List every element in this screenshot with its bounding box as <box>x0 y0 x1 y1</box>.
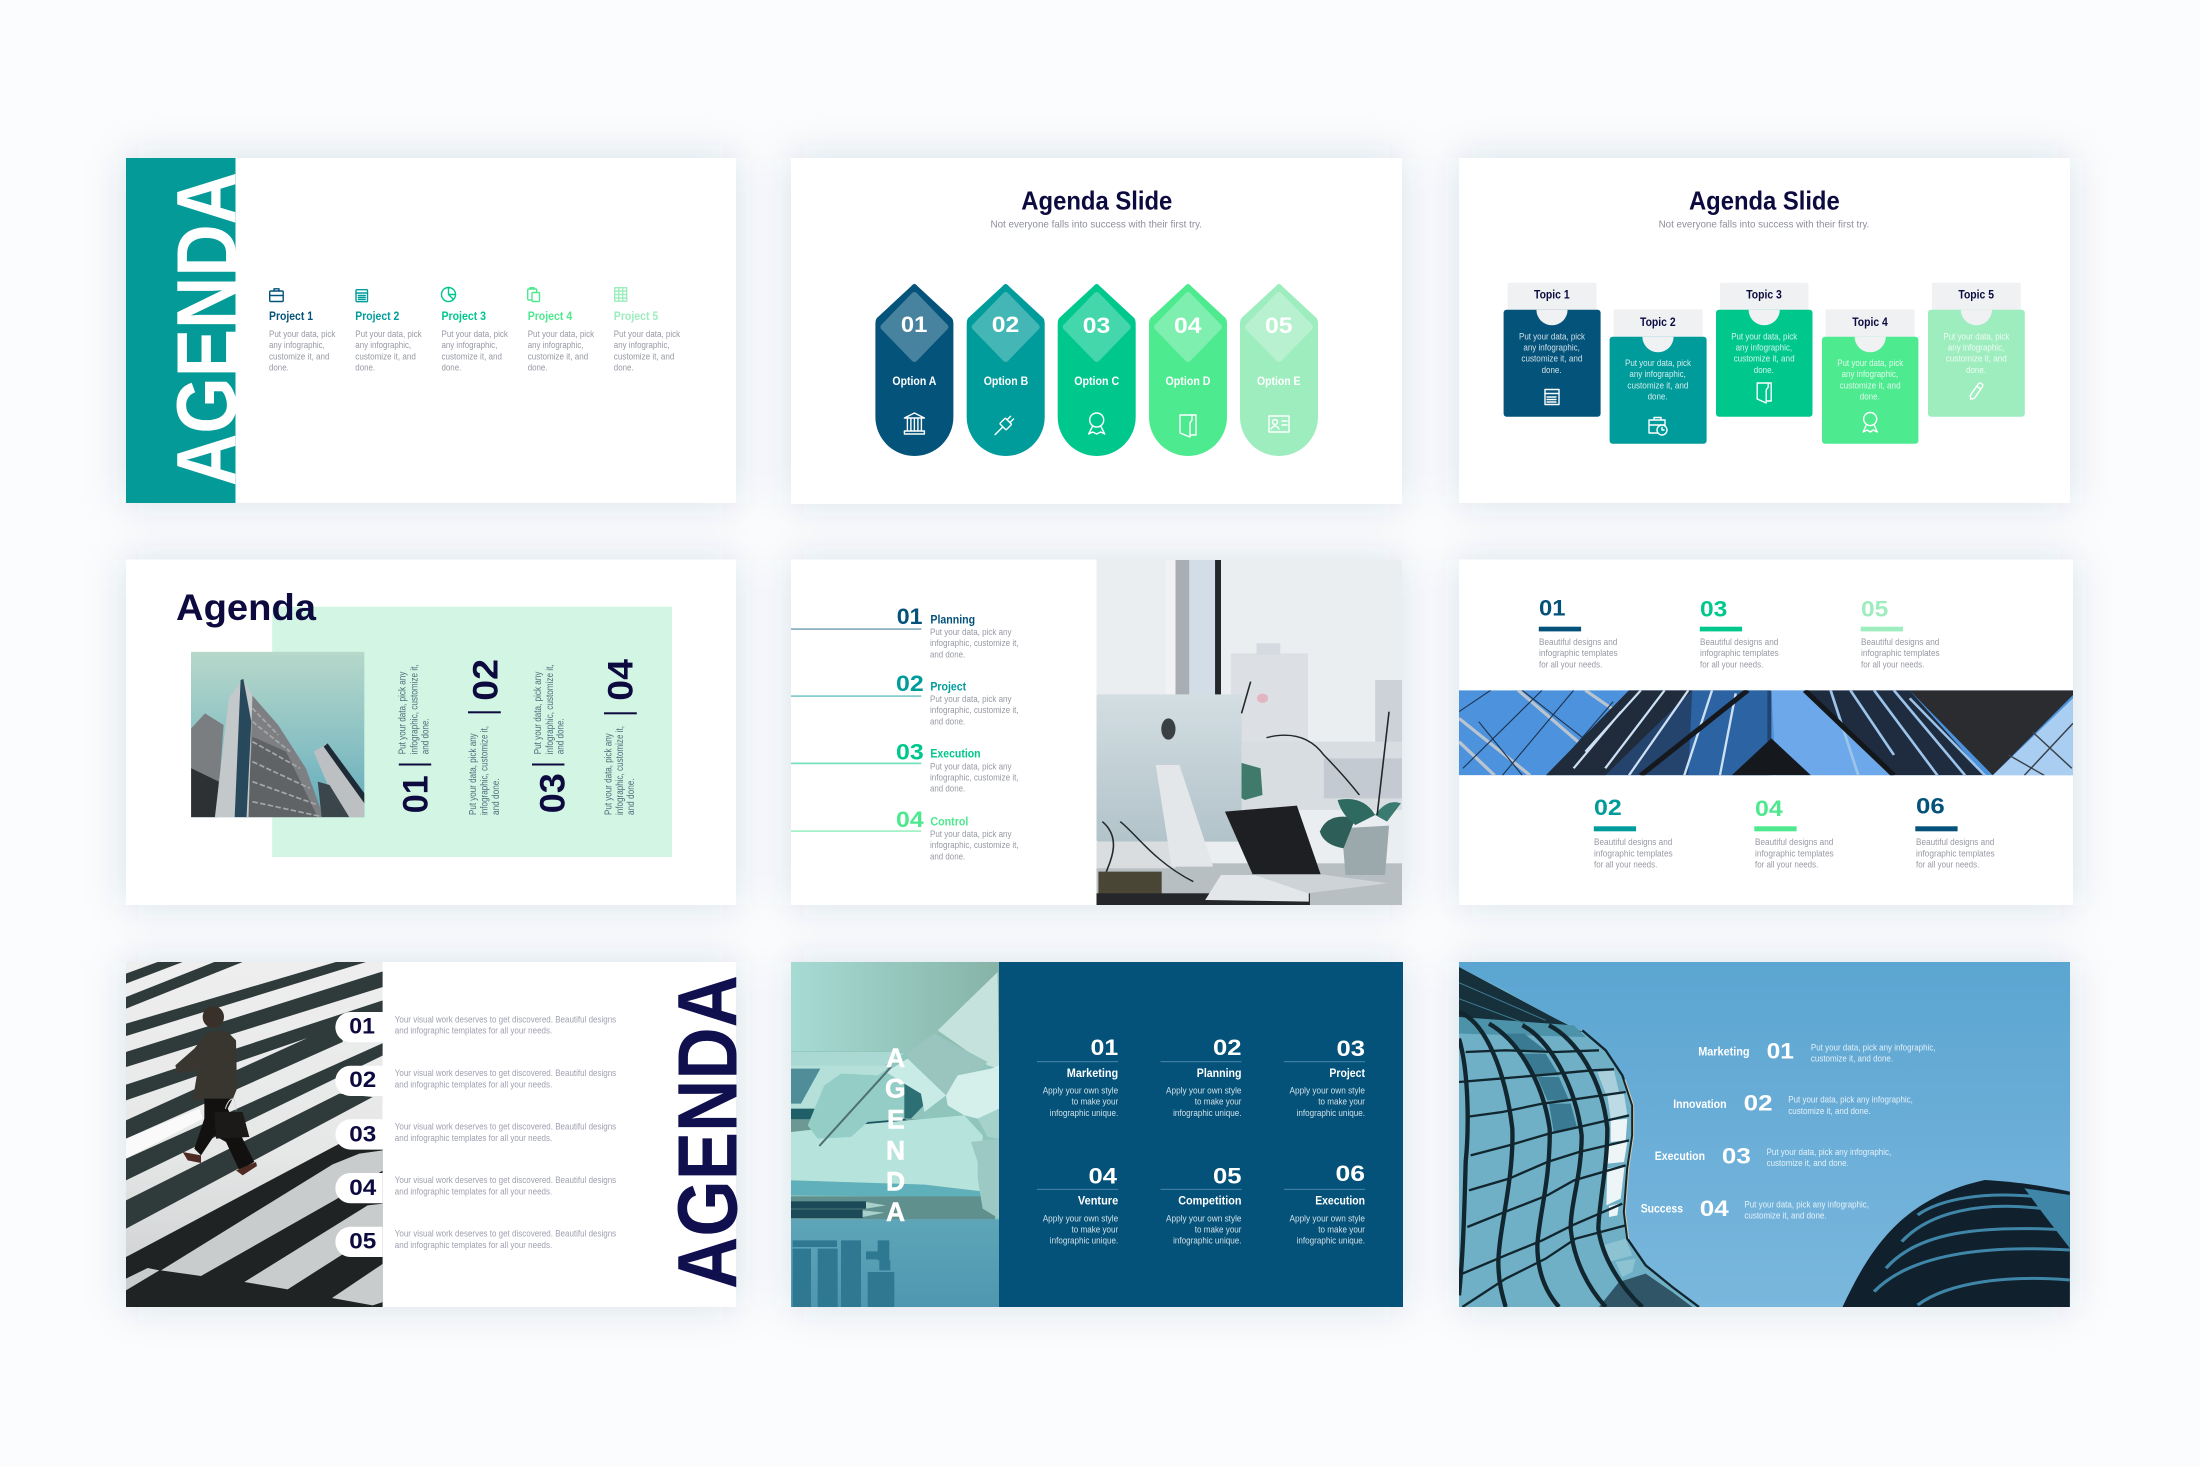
item 01: infographic, customize it, <box>409 664 420 754</box>
topic card 3 <box>1716 283 1812 417</box>
topic card 3: done. <box>1754 365 1774 375</box>
item 04 venture <box>1037 1164 1118 1246</box>
item 04 venture: Venture <box>1078 1194 1118 1208</box>
project 4 title: Project 4 <box>528 309 572 323</box>
item 05: for all your needs. <box>1861 659 1924 669</box>
item 02 planning: infographic unique. <box>1173 1108 1242 1118</box>
text 05: and infographic templates for all your needs. <box>395 1240 552 1250</box>
icon: door <box>1757 383 1771 403</box>
item 03 execution <box>791 739 1019 794</box>
heading: Agenda Slide <box>1689 185 1840 215</box>
icon: ribbon <box>1089 413 1105 434</box>
text 05 <box>395 1229 617 1250</box>
item 01: Put your data, pick any <box>398 672 408 754</box>
project 2 text <box>355 329 422 373</box>
text 02: Your visual work deserves to get discovered. Beautiful designs <box>395 1068 617 1078</box>
topic card 4: Topic 4 <box>1852 315 1888 329</box>
project 5 text: customize it, and <box>614 352 674 362</box>
topic card 1: Put your data, pick <box>1519 331 1585 341</box>
item 01 planning: 01 <box>897 604 922 629</box>
item 01 marketing: Apply your own style <box>1043 1086 1118 1096</box>
item 02 planning: Apply your own style <box>1166 1086 1242 1096</box>
project 3 text: any infographic, <box>442 340 497 350</box>
option pill C <box>1058 284 1136 456</box>
item 05: Beautiful designs and <box>1861 637 1939 647</box>
number tab 02: 02 <box>349 1067 376 1092</box>
row 04 success: Put your data, pick any infographic, <box>1744 1199 1869 1209</box>
project 4 text: Put your data, pick <box>528 329 595 339</box>
item 06 execution <box>1284 1161 1365 1246</box>
item 02: for all your needs. <box>1594 859 1657 869</box>
item 04 control: and done. <box>930 851 965 861</box>
panel: slide 2 option pills <box>791 158 1402 504</box>
topic card 4 <box>1822 309 1918 444</box>
item 04 venture: to make your <box>1072 1224 1118 1234</box>
item 05 competition: infographic unique. <box>1173 1236 1242 1246</box>
item 02: infographic templates <box>1594 848 1673 858</box>
subtitle: Not everyone falls into success with their first try. <box>1659 218 1869 230</box>
stacked heading AGENDA <box>885 1043 906 1227</box>
stacked heading AGENDA: A <box>886 1197 905 1227</box>
item 02: 02 <box>1594 795 1622 820</box>
icon: pie chart <box>442 288 456 302</box>
row 01 marketing: 01 <box>1767 1038 1794 1063</box>
topic card 2: any infographic, <box>1629 369 1686 379</box>
item 05 competition: 05 <box>1213 1164 1242 1189</box>
item 03 project: Project <box>1329 1066 1365 1080</box>
row 02 innovation: customize it, and done. <box>1788 1106 1870 1116</box>
icon: calendar <box>1545 390 1559 404</box>
topic card 2: done. <box>1648 392 1668 402</box>
item 01 marketing <box>1037 1035 1118 1118</box>
row 01 marketing <box>1698 1038 1936 1064</box>
topic card 4: any infographic, <box>1842 369 1898 379</box>
project 5 text: Put your data, pick <box>614 329 681 339</box>
project 1 text: done. <box>269 363 289 373</box>
photo: man on crosswalk <box>126 962 383 1307</box>
item 05 <box>1861 597 1940 669</box>
option pill A <box>875 284 953 456</box>
project 2 text: customize it, and <box>355 352 416 362</box>
text 04: and infographic templates for all your needs. <box>395 1186 552 1196</box>
project 2 title: Project 2 <box>355 309 400 323</box>
panel: slide 5 list with office photo <box>791 560 1403 906</box>
item 03 project: to make your <box>1318 1097 1365 1107</box>
heading: Agenda Slide <box>1021 185 1172 215</box>
text 01: and infographic templates for all your needs. <box>395 1026 552 1036</box>
panel: slide 6 numbered with band photo <box>1459 560 2073 905</box>
item 04 control: 04 <box>896 807 925 832</box>
teal band <box>126 158 236 503</box>
topic card 4: customize it, and <box>1840 380 1901 390</box>
item 02: and done. <box>491 778 502 815</box>
topic card 5: Topic 5 <box>1958 288 1994 302</box>
project 4 text: customize it, and <box>528 352 588 362</box>
option pill B: 02 <box>992 312 1019 337</box>
topic card 1 <box>1504 283 1601 417</box>
number tab 01: 01 <box>349 1013 375 1038</box>
panel: slide 8 navy six items <box>791 962 1403 1307</box>
item 02 project <box>791 671 1019 726</box>
number tab 04: 04 <box>349 1175 377 1200</box>
item 02 project: infographic, customize it, <box>930 705 1019 715</box>
option pill B <box>967 284 1045 456</box>
item 04: Put your data, pick any <box>604 733 614 815</box>
panel: slide 4 agenda vertical <box>126 560 736 905</box>
icon: ribbon <box>1863 412 1877 432</box>
option pill E <box>1240 284 1318 456</box>
item 01 marketing: Marketing <box>1067 1066 1118 1080</box>
item 06: for all your needs. <box>1916 859 1979 869</box>
item 06 <box>1915 794 1995 869</box>
vertical heading AGENDA: AGENDA <box>160 172 254 486</box>
project 3 text <box>442 329 508 373</box>
item 04 <box>1754 796 1834 869</box>
item 02: 02 <box>467 659 506 701</box>
item 02 planning: to make your <box>1195 1097 1242 1107</box>
item 04 control: infographic, customize it, <box>930 840 1019 850</box>
project 5 text: done. <box>614 363 634 373</box>
item 03: 03 <box>534 773 572 813</box>
item 06 execution: to make your <box>1318 1224 1365 1234</box>
row 03 execution: 03 <box>1722 1143 1751 1168</box>
project 3 text: done. <box>442 363 461 373</box>
project 5 title: Project 5 <box>614 309 659 323</box>
item 01: infographic templates <box>1539 648 1618 658</box>
item 03 <box>1700 597 1779 669</box>
item 02 <box>1594 795 1673 869</box>
item 04: 04 <box>602 658 640 701</box>
item 01 planning <box>791 604 1019 659</box>
item 01 <box>1539 596 1618 669</box>
text 02: and infographic templates for all your needs. <box>395 1079 552 1089</box>
item 03: for all your needs. <box>1700 659 1763 669</box>
topic card 5: Put your data, pick <box>1943 331 2010 341</box>
item 05: 05 <box>1861 597 1888 622</box>
item 01 marketing: infographic unique. <box>1050 1108 1118 1118</box>
heading: Agenda <box>176 587 316 628</box>
item 04 venture: 04 <box>1088 1164 1118 1189</box>
item 01 planning: infographic, customize it, <box>930 638 1019 648</box>
item 02: Beautiful designs and <box>1594 837 1672 847</box>
project 1 text <box>269 329 336 373</box>
row 03 execution: Put your data, pick any infographic, <box>1767 1147 1891 1157</box>
row 02 innovation <box>1673 1090 1913 1116</box>
project 2 text: done. <box>355 363 375 373</box>
number tab 03: 03 <box>349 1122 376 1146</box>
item 06 execution: 06 <box>1336 1161 1365 1186</box>
item 03: Beautiful designs and <box>1700 637 1778 647</box>
icon: briefcase <box>270 289 283 302</box>
row 01 marketing: Marketing <box>1698 1045 1750 1059</box>
row 02 innovation: Innovation <box>1673 1097 1727 1111</box>
stacked heading AGENDA: G <box>885 1074 906 1104</box>
panel: slide 1 projects <box>126 158 736 503</box>
item 02 <box>467 659 506 815</box>
topic card 1: done. <box>1542 365 1562 375</box>
item 01 marketing: 01 <box>1090 1035 1118 1060</box>
text 03 <box>395 1122 617 1143</box>
project 2 text: Put your data, pick <box>355 329 422 339</box>
row 02 innovation: 02 <box>1744 1090 1773 1115</box>
item 02 planning: Planning <box>1197 1066 1242 1080</box>
text 04: Your visual work deserves to get discovered. Beautiful designs <box>395 1175 617 1185</box>
slide shadows <box>126 158 2073 1307</box>
topic card 2: customize it, and <box>1627 380 1688 390</box>
topic card 5: customize it, and <box>1946 354 2007 364</box>
project 1 text: customize it, and <box>269 352 330 362</box>
text 01 <box>395 1014 617 1036</box>
item 04: for all your needs. <box>1755 859 1818 869</box>
item 03: 03 <box>1700 597 1727 622</box>
project 2 text: any infographic, <box>355 340 411 350</box>
icon: door <box>1180 415 1196 437</box>
mint background block <box>272 607 672 857</box>
item 02 project: 02 <box>896 671 924 696</box>
item 06 execution: infographic unique. <box>1297 1236 1365 1246</box>
topic card 3: Put your data, pick <box>1731 331 1798 341</box>
topic card 3: any infographic, <box>1736 342 1792 352</box>
topic card 1: any infographic, <box>1523 342 1580 352</box>
row 03 execution: Execution <box>1655 1149 1705 1163</box>
option pill B: Option B <box>984 374 1028 388</box>
item 05: infographic templates <box>1861 648 1940 658</box>
item 01: 01 <box>1539 596 1566 621</box>
row 02 innovation: Put your data, pick any infographic, <box>1788 1095 1913 1105</box>
item 04 control <box>791 807 1019 861</box>
item 03: infographic templates <box>1700 648 1779 658</box>
row 01 marketing: customize it, and done. <box>1811 1054 1893 1064</box>
item 03 project: Apply your own style <box>1290 1086 1365 1096</box>
item 04 venture: Apply your own style <box>1043 1213 1118 1223</box>
project 1 text: Put your data, pick <box>269 329 336 339</box>
number tab 01 <box>335 1012 383 1042</box>
topic card 3: customize it, and <box>1734 354 1795 364</box>
item 03: Put your data, pick any <box>533 672 544 754</box>
item 03: infographic, customize it, <box>545 664 556 754</box>
subtitle: Not everyone falls into success with their first try. <box>990 219 1202 231</box>
project 1 text: any infographic, <box>269 340 325 350</box>
item 04: infographic templates <box>1755 848 1834 858</box>
icon: briefcase clock <box>1649 418 1667 435</box>
item 04: and done. <box>626 778 637 815</box>
option pill A: 01 <box>901 312 927 337</box>
item 06: Beautiful designs and <box>1916 837 1994 847</box>
item 03 project: 03 <box>1336 1036 1365 1061</box>
option pill D <box>1149 284 1227 456</box>
item 04: 04 <box>1755 796 1784 821</box>
topic card 4: done. <box>1860 392 1880 402</box>
topic card 2 <box>1610 309 1707 444</box>
item 02: infographic, customize it, <box>480 726 491 815</box>
item 03 execution: 03 <box>896 739 924 764</box>
item 06 execution: Execution <box>1315 1194 1365 1208</box>
item 06: 06 <box>1916 794 1945 818</box>
icon: building <box>615 288 627 301</box>
panel: slide 9 blue sky buildings <box>1459 962 2070 1307</box>
text 04 <box>395 1175 617 1196</box>
item 03 execution: and done. <box>930 784 965 794</box>
panel: slide 3 topic cards <box>1459 158 2070 503</box>
text 02 <box>395 1068 617 1089</box>
item 04 venture: infographic unique. <box>1050 1236 1118 1246</box>
project 5 text: any infographic, <box>614 340 670 350</box>
item 04: Beautiful designs and <box>1755 837 1833 847</box>
option pill A: Option A <box>892 374 937 388</box>
item 05 competition: Competition <box>1178 1194 1242 1208</box>
item 01: for all your needs. <box>1539 659 1602 669</box>
icon: id card <box>1269 416 1289 432</box>
topic card 1: customize it, and <box>1521 354 1582 364</box>
topic card 5 <box>1928 283 2025 417</box>
photo: glass facade band <box>1459 690 2073 775</box>
item 05 competition <box>1160 1164 1242 1246</box>
row 03 execution <box>1655 1143 1891 1168</box>
photo: curved glass buildings <box>1459 962 2070 1307</box>
vertical heading AGENDA: AGENDA <box>660 975 754 1289</box>
topic card 3: Topic 3 <box>1746 288 1782 302</box>
item 02 project: Project <box>930 679 966 693</box>
topic card 2: Put your data, pick <box>1625 358 1691 368</box>
number tab 04 <box>335 1173 383 1203</box>
photo: hands on paper <box>791 962 999 1307</box>
topic card 5: any infographic, <box>1948 342 2004 352</box>
item 04 control: Put your data, pick any <box>930 829 1012 839</box>
photo: skyscraper <box>191 652 364 817</box>
number tab 02 <box>335 1066 383 1096</box>
row 01 marketing: Put your data, pick any infographic, <box>1811 1042 1936 1052</box>
item 03 <box>532 664 572 813</box>
option pill E: 05 <box>1265 313 1292 338</box>
row 04 success <box>1641 1196 1869 1221</box>
stacked heading AGENDA: N <box>886 1135 905 1165</box>
option pill C: Option C <box>1074 374 1119 388</box>
item 06 execution: Apply your own style <box>1290 1213 1365 1223</box>
item 04: infographic, customize it, <box>615 726 626 815</box>
item 01: and done. <box>420 718 431 754</box>
project 1 title: Project 1 <box>269 309 313 323</box>
icon: plug <box>992 414 1015 438</box>
row 04 success: Success <box>1641 1201 1683 1215</box>
row 03 execution: customize it, and done. <box>1767 1158 1849 1168</box>
number tab 05 <box>335 1227 383 1257</box>
text 03: and infographic templates for all your needs. <box>395 1133 552 1143</box>
project 4 text: done. <box>528 363 548 373</box>
item 02 planning <box>1160 1035 1242 1118</box>
item 03 execution: infographic, customize it, <box>930 772 1019 782</box>
item 01: 01 <box>397 775 436 813</box>
item 04 <box>602 658 640 815</box>
item 02 project: Put your data, pick any <box>930 694 1012 704</box>
project 3 title: Project 3 <box>442 309 486 323</box>
text 01: Your visual work deserves to get discovered. Beautiful designs <box>395 1014 617 1024</box>
project 3 text: customize it, and <box>442 352 502 362</box>
item 01 <box>397 664 436 813</box>
topic card 2: Topic 2 <box>1640 315 1676 329</box>
item 06: infographic templates <box>1916 848 1995 858</box>
item 03 execution: Execution <box>930 747 981 761</box>
stacked heading AGENDA: A <box>886 1043 905 1073</box>
item 01 planning: and done. <box>930 649 965 659</box>
row 04 success: customize it, and done. <box>1744 1210 1827 1220</box>
item 03: and done. <box>556 718 567 754</box>
project 5 text <box>614 329 681 373</box>
item 02 planning: 02 <box>1213 1035 1242 1060</box>
item 03 execution: Put your data, pick any <box>930 761 1012 771</box>
photo: desk with computer <box>1096 560 1403 906</box>
item 05 competition: Apply your own style <box>1166 1213 1242 1223</box>
item 01 planning: Planning <box>930 612 975 626</box>
icon: calendar <box>356 290 368 302</box>
item 01 marketing: to make your <box>1072 1097 1118 1107</box>
item 02 project: and done. <box>930 716 965 726</box>
stacked heading AGENDA: E <box>887 1105 905 1135</box>
project 4 text: any infographic, <box>528 340 584 350</box>
row 04 success: 04 <box>1700 1196 1730 1221</box>
panel: slide 7 crosswalk <box>126 962 754 1307</box>
project 4 text <box>528 329 595 373</box>
option pill D: Option D <box>1166 374 1211 388</box>
number tab 03 <box>335 1119 383 1150</box>
icon: pipette <box>1969 382 1984 401</box>
topic card 5: done. <box>1966 365 1986 375</box>
option pill E: Option E <box>1257 374 1300 388</box>
item 05 competition: to make your <box>1195 1224 1242 1234</box>
number tab 05: 05 <box>349 1229 376 1254</box>
text 05: Your visual work deserves to get discovered. Beautiful designs <box>395 1229 617 1239</box>
topic card 4: Put your data, pick <box>1837 358 1904 368</box>
item 01 planning: Put your data, pick any <box>930 627 1012 637</box>
icon: bank <box>904 413 924 434</box>
item 04 control: Control <box>930 814 968 828</box>
option pill C: 03 <box>1083 313 1110 338</box>
project 3 text: Put your data, pick <box>442 329 508 339</box>
item 02: Put your data, pick any <box>468 733 479 815</box>
option pill D: 04 <box>1174 313 1202 338</box>
item 03 project <box>1284 1036 1365 1118</box>
icon: clipboard <box>528 288 540 302</box>
item 03 project: infographic unique. <box>1297 1108 1365 1118</box>
stacked heading AGENDA: D <box>886 1166 905 1196</box>
topic card 1: Topic 1 <box>1534 288 1570 302</box>
text 03: Your visual work deserves to get discovered. Beautiful designs <box>395 1122 617 1132</box>
item 01: Beautiful designs and <box>1539 637 1617 647</box>
